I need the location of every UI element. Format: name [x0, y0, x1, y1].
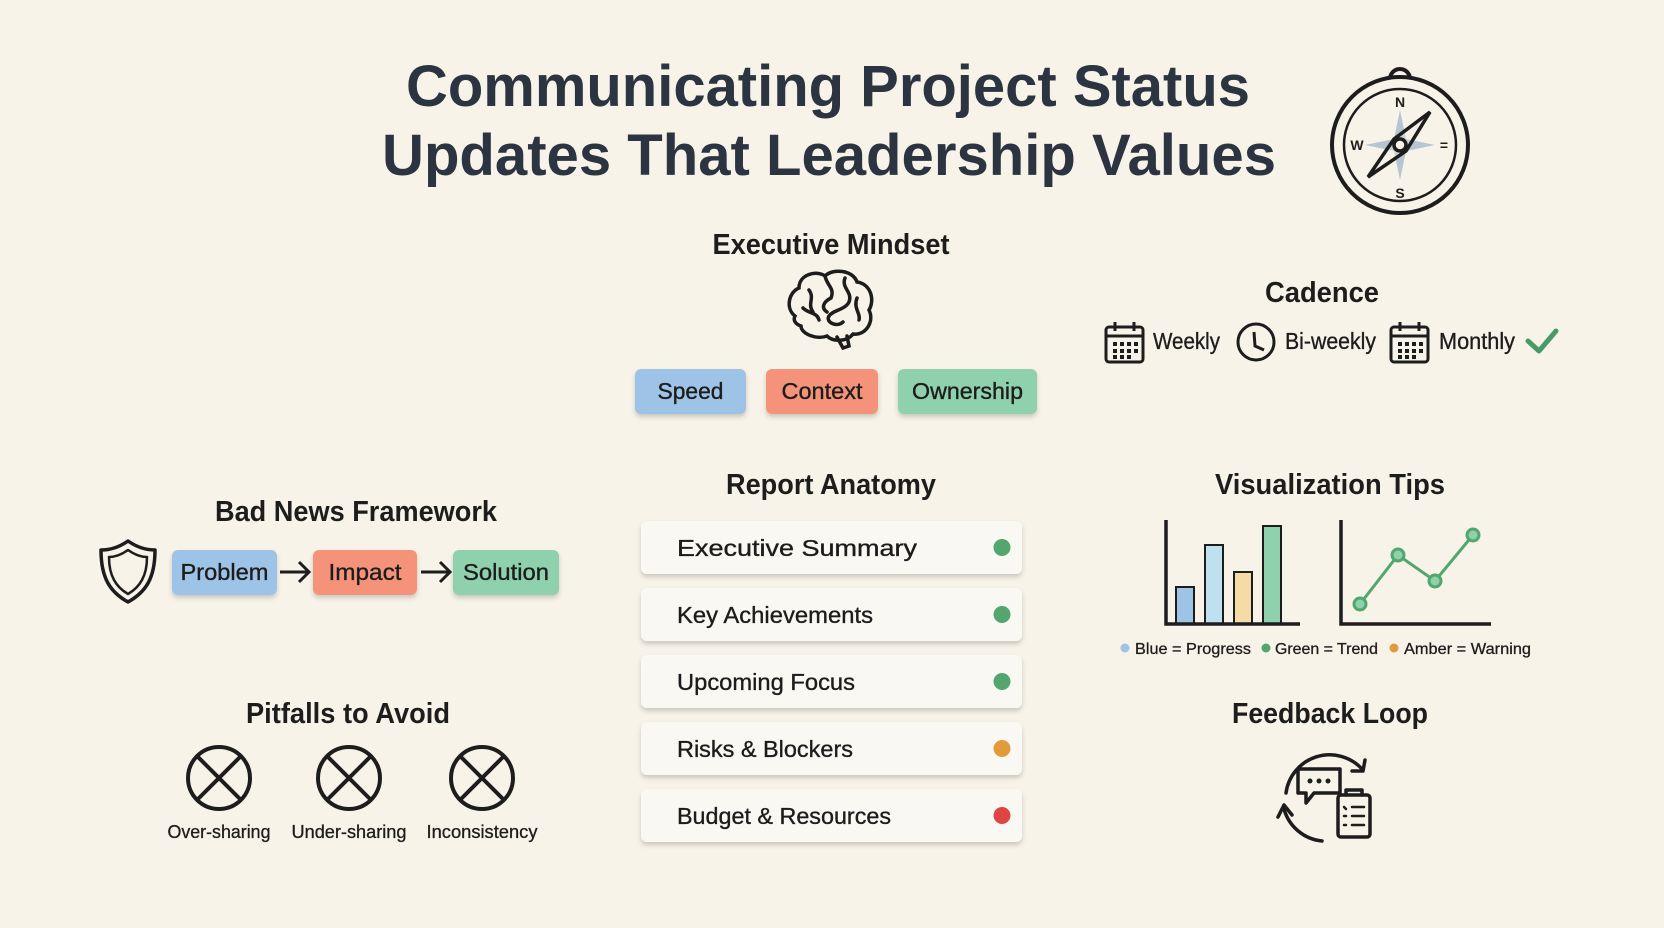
heading: pitfalls to avoid: Pitfalls to Avoid [246, 698, 450, 730]
pill: context [766, 369, 878, 414]
card: key achievements [641, 588, 1022, 641]
icon: brain [789, 271, 872, 348]
icon: compass: S [1395, 185, 1405, 201]
heading: cadence: Cadence [1265, 277, 1379, 309]
icon: shield [101, 541, 155, 602]
icon: compass: N [1395, 94, 1405, 110]
flow: problem impact solution: Impact [328, 559, 402, 585]
heading: visualization tips: Visualization Tips [1215, 469, 1445, 501]
icon: check [1528, 331, 1556, 351]
legend: Amber = Warning [1404, 641, 1531, 658]
title: Updates That Leadership Values [382, 123, 1276, 188]
heading: feedback loop: Feedback Loop [1232, 698, 1428, 730]
icon: compass: = [1440, 137, 1448, 153]
pill: ownership [898, 369, 1037, 414]
legend: Green = Trend [1275, 641, 1378, 658]
card: budget & resources: Budget & Resources [677, 803, 891, 829]
pitfall labels: Over-sharing [168, 822, 270, 842]
cadence row: Monthly [1439, 328, 1515, 354]
heading: bad news framework: Bad News Framework [215, 496, 498, 528]
card: risks & blockers [641, 722, 1022, 775]
line chart [1341, 520, 1491, 624]
pitfall labels: Under-sharing [292, 822, 406, 842]
pill: speed: Speed [658, 378, 724, 404]
card: upcoming focus [641, 655, 1022, 708]
cadence row: Bi-weekly [1285, 328, 1376, 354]
icon: calendar monthly [1391, 322, 1428, 362]
legend [1120, 641, 1531, 658]
flow: problem impact solution [172, 550, 559, 595]
card: budget & resources [641, 789, 1022, 842]
pill: ownership: Ownership [912, 378, 1023, 404]
flow: problem impact solution: Solution [463, 559, 549, 585]
card: executive summary: Executive Summary [677, 535, 918, 561]
heading: report anatomy: Report Anatomy [726, 469, 936, 501]
card: executive summary [641, 521, 1022, 574]
pitfall labels: Inconsistency [426, 822, 538, 842]
icon: feedback loop [1278, 755, 1370, 841]
card: risks & blockers: Risks & Blockers [677, 736, 853, 762]
pitfall labels [168, 822, 538, 842]
pill: context: Context [782, 378, 863, 404]
icon: compass [1332, 69, 1468, 213]
card: key achievements: Key Achievements [677, 602, 873, 628]
flow: problem impact solution: Problem [180, 559, 268, 585]
bar chart [1166, 520, 1300, 624]
icon: calendar weekly [1106, 322, 1143, 362]
icon: clock [1238, 324, 1274, 360]
title: Communicating Project Status [406, 54, 1250, 119]
title [382, 54, 1276, 188]
card: upcoming focus: Upcoming Focus [677, 669, 855, 695]
pitfalls icons [188, 747, 513, 809]
icon: compass: W [1350, 137, 1364, 153]
report cards [641, 521, 1022, 842]
cadence row: Weekly [1153, 328, 1220, 354]
cadence row [1106, 322, 1556, 362]
legend: Blue = Progress [1135, 641, 1251, 658]
heading: executive mindset: Executive Mindset [712, 229, 950, 261]
pill: speed [635, 369, 746, 414]
